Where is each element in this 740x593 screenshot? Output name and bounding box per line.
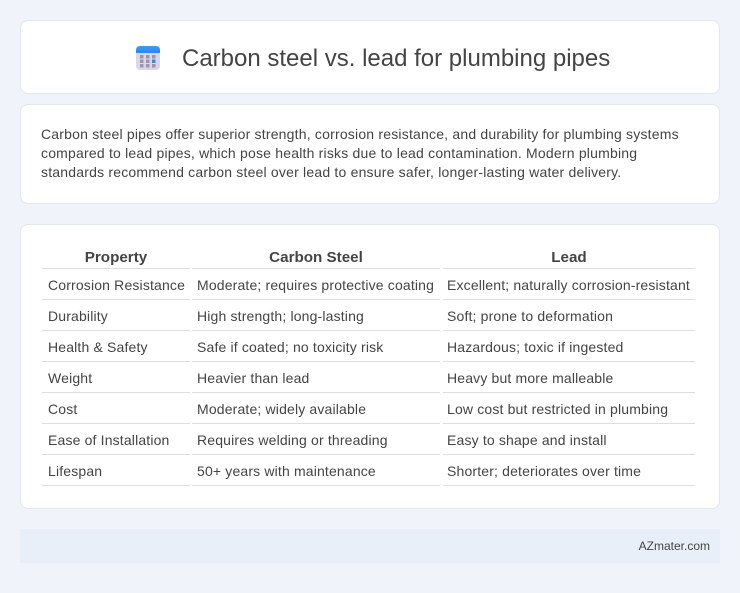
table headers: Property bbox=[85, 249, 147, 266]
row: weight: Heavier than lead bbox=[197, 370, 309, 386]
row: durability: Durability bbox=[48, 308, 108, 324]
row: ease of installation bbox=[42, 432, 695, 455]
row: ease of installation: Easy to shape and install bbox=[447, 432, 607, 448]
row: corrosion resistance: Moderate; requires protective coating bbox=[197, 277, 434, 293]
row: durability: High strength; long-lasting bbox=[197, 308, 364, 324]
panel: title card bbox=[20, 20, 720, 94]
row: cost: Moderate; widely available bbox=[197, 401, 366, 417]
table headers: Lead bbox=[551, 249, 587, 266]
panel: comparison table bbox=[20, 224, 720, 509]
icon: calendar bbox=[136, 46, 160, 70]
row: ease of installation: Ease of Installation bbox=[48, 432, 170, 448]
row: lifespan: Shorter; deteriorates over time bbox=[447, 463, 641, 479]
summary text: standards recommend carbon steel over lead to ensure safer, longer-lasting water delivery. bbox=[41, 164, 621, 180]
row: corrosion resistance: Corrosion Resistance bbox=[48, 277, 185, 293]
row: ease of installation: Requires welding or threading bbox=[197, 432, 388, 448]
row: cost: Low cost but restricted in plumbing bbox=[447, 401, 668, 417]
row: durability: Soft; prone to deformation bbox=[447, 308, 613, 324]
summary text: Carbon steel pipes offer superior strength, corrosion resistance, and durability for plumbing systems bbox=[41, 126, 679, 142]
row: durability bbox=[42, 308, 695, 331]
footer bar bbox=[20, 529, 720, 563]
footer credit: AZmater.com bbox=[639, 539, 710, 553]
row: health and safety: Hazardous; toxic if ingested bbox=[447, 339, 623, 355]
row: corrosion resistance bbox=[42, 277, 695, 300]
summary text: compared to lead pipes, which pose health risks due to lead contamination. Modern plumbing bbox=[41, 145, 637, 161]
row: cost bbox=[42, 401, 695, 424]
row: health and safety bbox=[42, 339, 695, 362]
table headers: Carbon Steel bbox=[269, 249, 363, 266]
row: weight: Heavy but more malleable bbox=[447, 370, 613, 386]
title: Carbon steel vs. lead for plumbing pipes bbox=[182, 45, 610, 72]
panel: summary bbox=[20, 104, 720, 204]
row: lifespan bbox=[42, 463, 695, 486]
row: weight: Weight bbox=[48, 370, 92, 386]
row: health and safety: Health & Safety bbox=[48, 339, 148, 355]
row: cost: Cost bbox=[48, 401, 77, 417]
table headers bbox=[42, 249, 695, 269]
row: weight bbox=[42, 370, 695, 393]
summary text bbox=[41, 126, 679, 180]
row: lifespan: Lifespan bbox=[48, 463, 102, 479]
row: lifespan: 50+ years with maintenance bbox=[197, 463, 376, 479]
row: corrosion resistance: Excellent; naturally corrosion-resistant bbox=[447, 277, 690, 293]
row: health and safety: Safe if coated; no toxicity risk bbox=[197, 339, 383, 355]
